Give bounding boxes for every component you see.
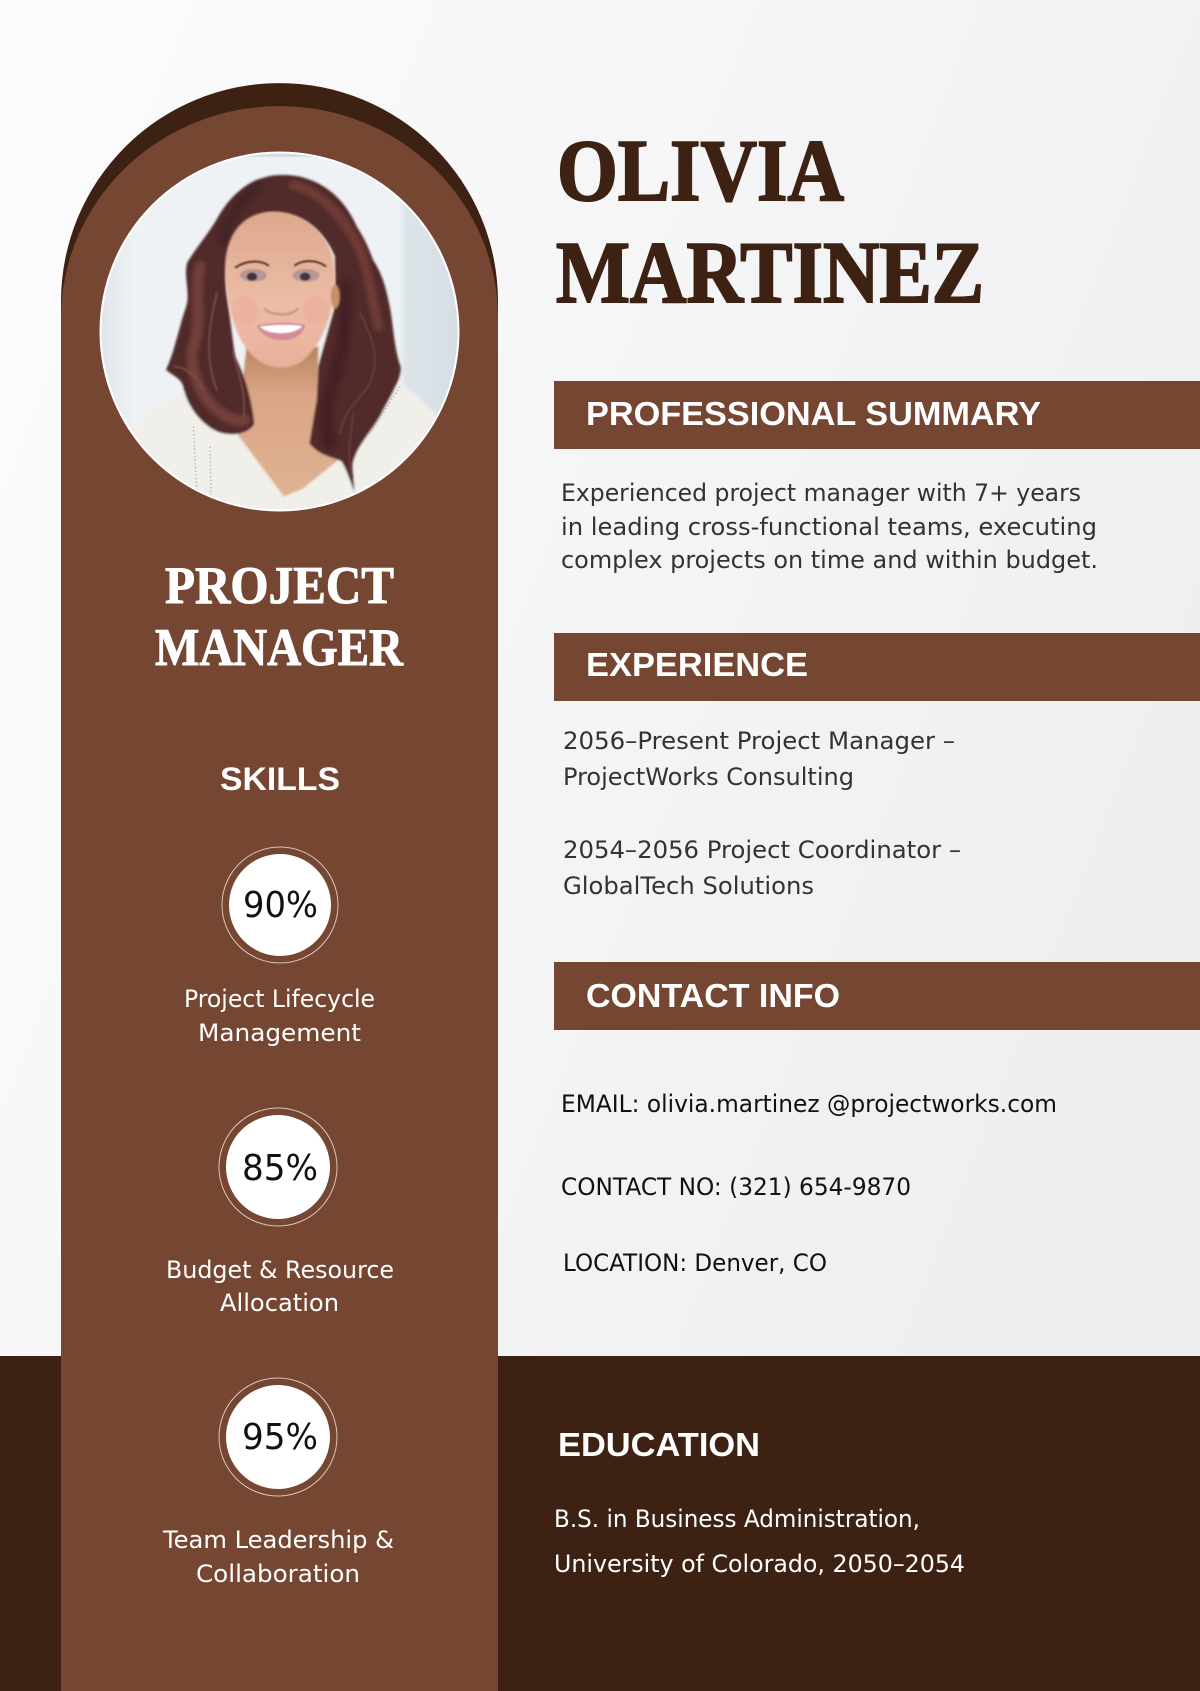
profile photo [99,151,460,520]
text block: contact details: EMAIL: olivia.martinez @projectworks.com [561,1090,1057,1118]
skill: project lifecycle management [184,847,375,1047]
face [225,212,335,368]
text block: experience entries: 2054–2056 Project Coordinator – [563,836,961,864]
skill: team leadership and collaboration: Team Leadership & [162,1526,394,1554]
section header: contact info: CONTACT INFO [586,977,840,1014]
title: name: OLIVIA [557,123,844,220]
hair strands [175,293,244,417]
dark arch behind left panel [61,83,498,320]
eyes and mouth [236,261,325,267]
title: name: MARTINEZ [556,225,984,322]
section header: professional summary: PROFESSIONAL SUMMARY [586,395,1041,432]
skill: team leadership and collaboration: 95% [242,1417,318,1458]
education heading: EDUCATION [558,1426,760,1463]
text block: experience entries: 2056–Present Project Manager – [563,727,955,755]
broad hair tones [192,267,245,421]
text block: summary: Experienced project manager with 7+ years [561,479,1081,507]
text block: contact details: CONTACT NO: (321) 654-9870 [561,1173,911,1201]
skill: team leadership and collaboration: Collaboration [196,1560,360,1588]
skill: project lifecycle management: Project Lifecycle [184,985,375,1013]
text block: summary: complex projects on time and within budget. [561,546,1098,574]
skill: team leadership and collaboration [162,1378,394,1588]
footer band [0,1356,1200,1691]
section header: contact info [554,962,1200,1030]
skill: budget and resource allocation: Allocation [220,1289,339,1317]
hair [166,175,401,492]
text block: education details: University of Colorado, 2050–2054 [554,1550,965,1578]
sidebar title: project manager: PROJECT [165,557,394,615]
text block: education details [554,1505,965,1578]
text block: summary [561,479,1098,574]
panel: left sidebar [61,106,498,1691]
text block: experience entries: ProjectWorks Consulting [563,763,854,791]
section header: experience [554,633,1200,701]
shirt [134,382,438,520]
section header: professional summary [554,381,1200,449]
text block: education details: B.S. in Business Administration, [554,1505,920,1533]
skill: project lifecycle management: 90% [243,885,318,926]
text block: experience entries [563,727,961,900]
title: name [556,123,984,322]
sidebar title: project manager: MANAGER [155,619,404,677]
skills heading: SKILLS [220,761,340,797]
shirt stitching [193,387,400,495]
text block: contact details [561,1090,1057,1277]
section header: experience: EXPERIENCE [586,646,808,683]
skill: budget and resource allocation: Budget & Resource [166,1256,394,1284]
text block: summary: in leading cross-functional teams, executing [561,513,1097,541]
skill: budget and resource allocation [166,1108,394,1317]
text block: contact details: LOCATION: Denver, CO [563,1249,827,1277]
skill: project lifecycle management: Management [198,1019,361,1047]
skill: budget and resource allocation: 85% [242,1148,318,1189]
text block: experience entries: GlobalTech Solutions [563,872,814,900]
sidebar title: project manager [155,557,404,677]
